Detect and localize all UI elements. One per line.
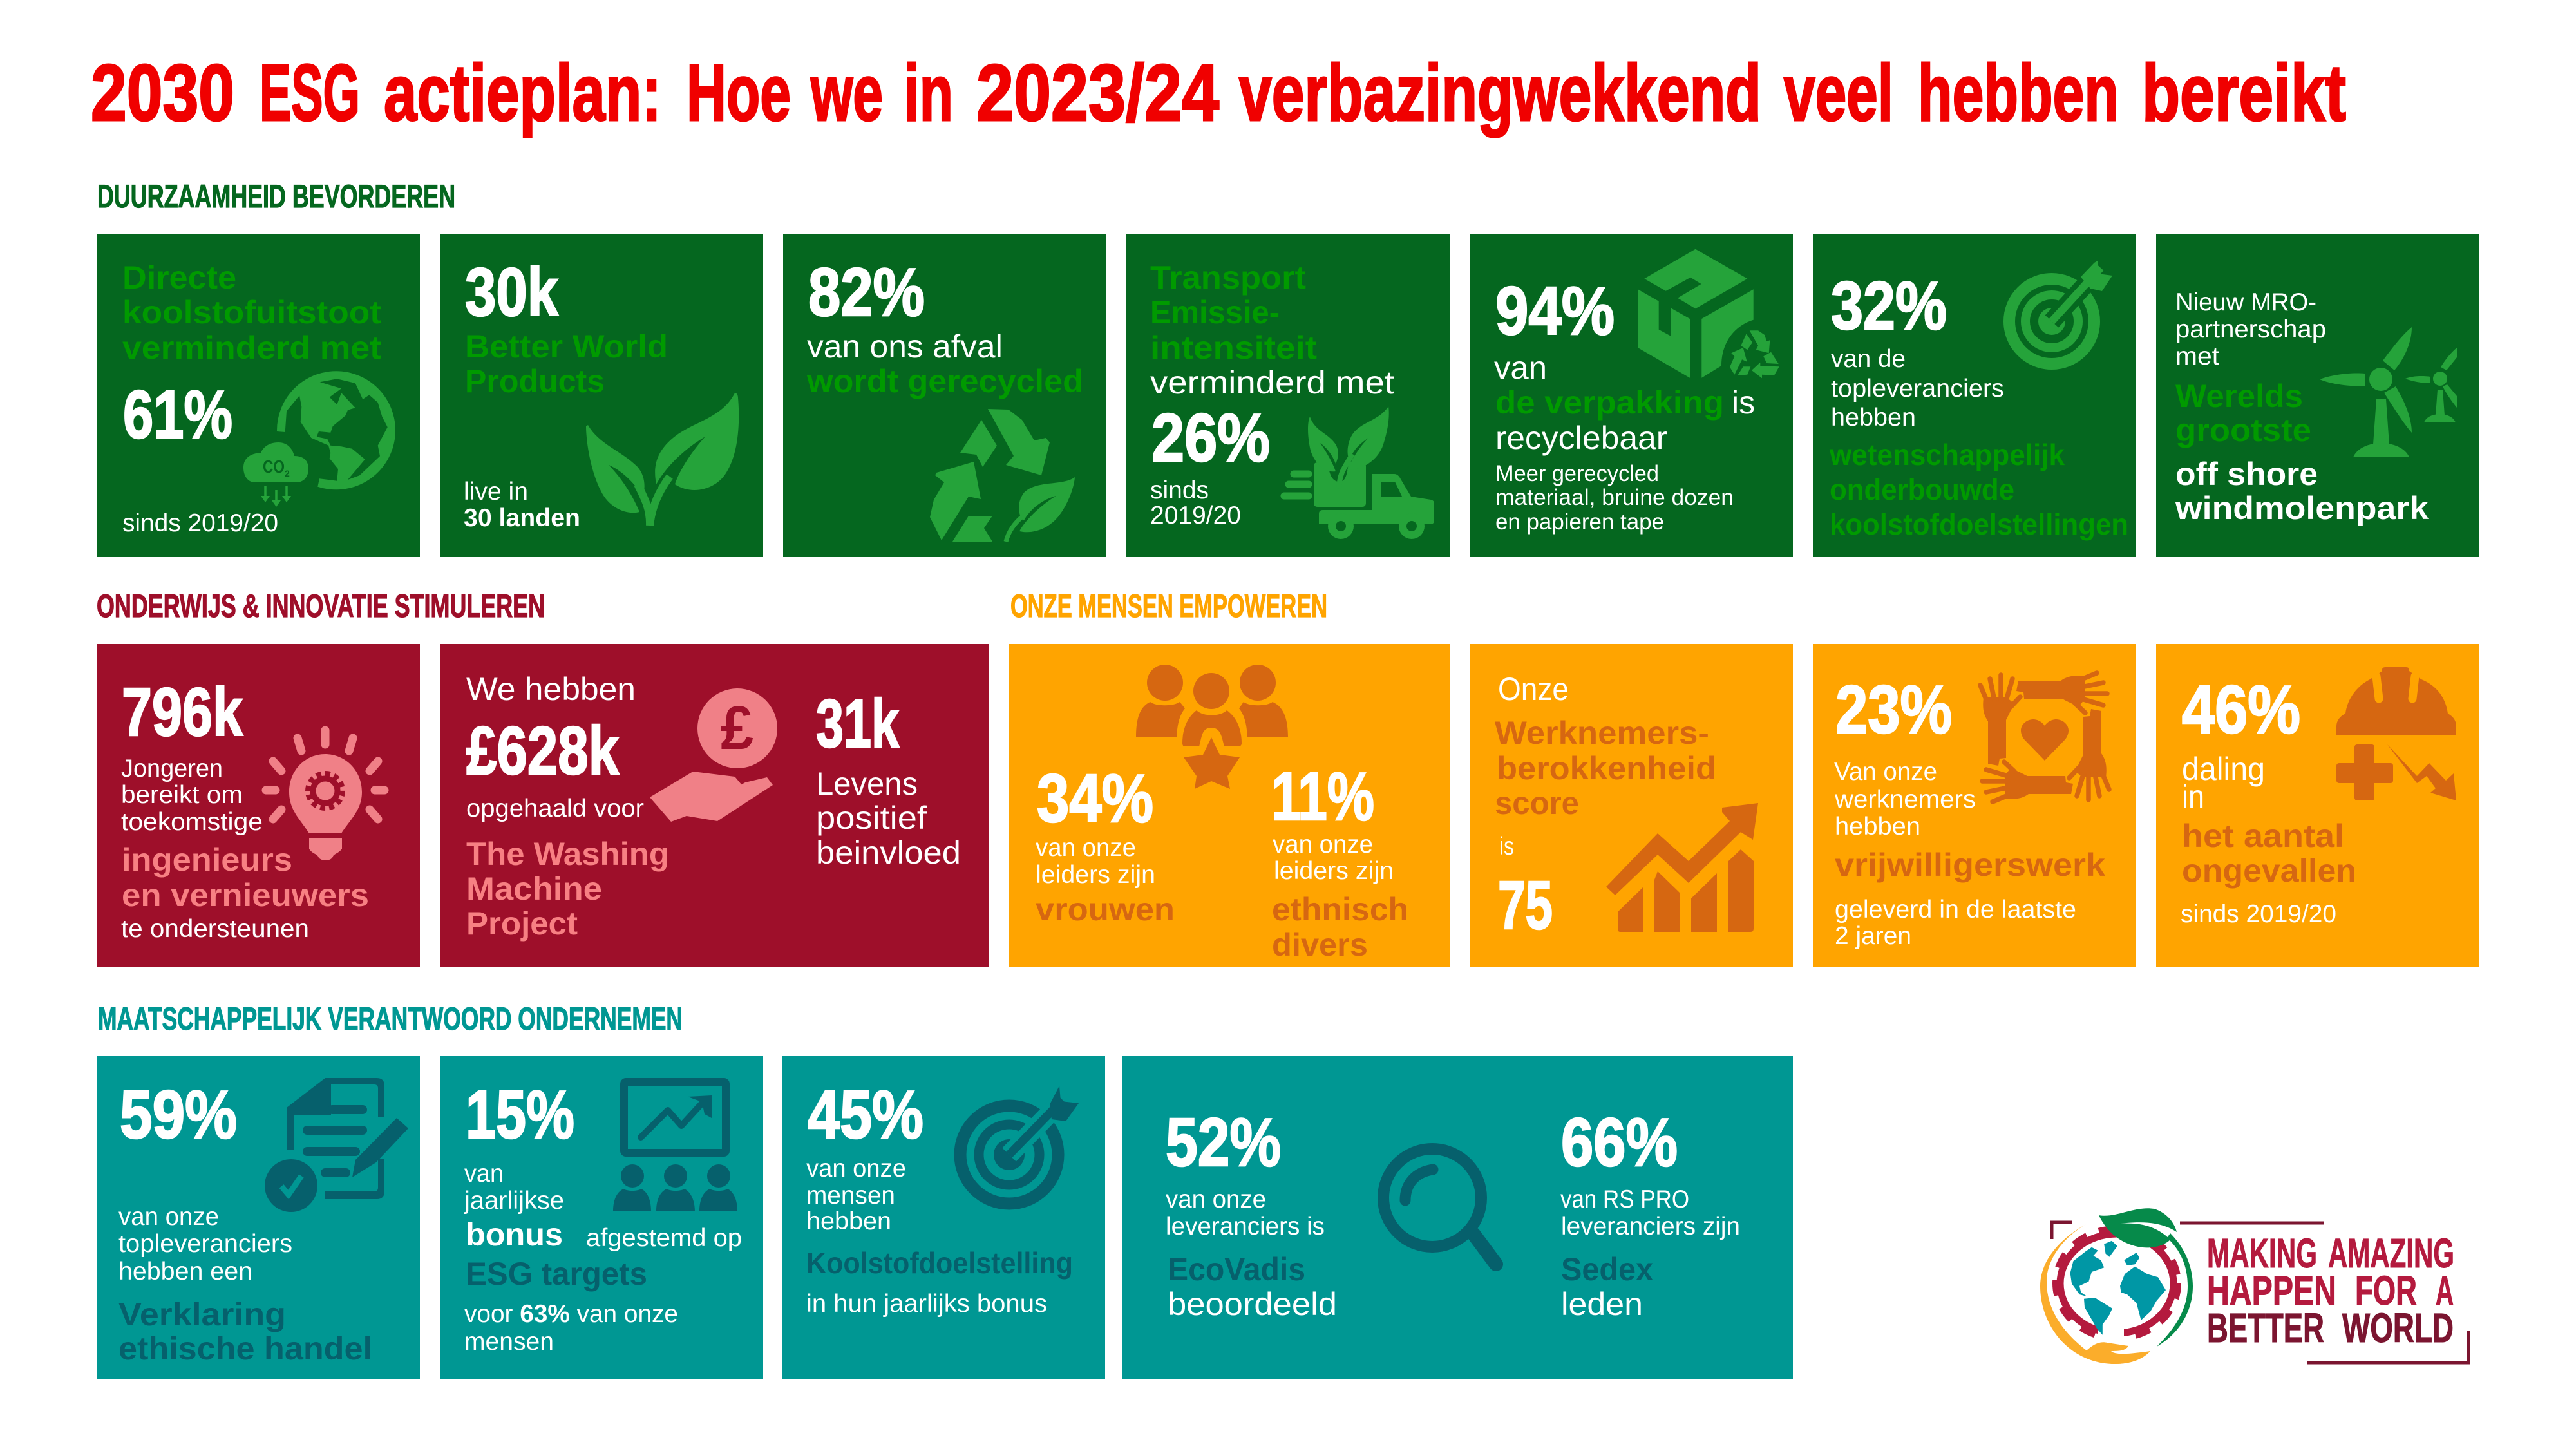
text: van onze werknemers hebben: hebben: [1835, 813, 1920, 840]
text: meer gerecycled materiaal: [1495, 461, 1734, 535]
text: van de verpakking is recyclebaar: [1494, 350, 1755, 456]
text: van onze mensen hebben: hebben: [806, 1208, 891, 1235]
text: van de topleveranciers hebben: van de: [1831, 345, 1906, 373]
text: van onze leiders zijn vrouwen: [1036, 834, 1175, 927]
title: [91, 49, 2346, 138]
text: van ons afval wordt gerecycled: wordt gerecycled: [806, 363, 1083, 399]
text: transport emissie-intensiteit: Transport: [1150, 260, 1306, 296]
text: opgehaald voor: opgehaald voor: [466, 795, 644, 822]
panel: 796k jongeren: [97, 644, 420, 967]
text: sinds 2019/20: [1150, 477, 1241, 529]
text: van onze werknemers hebben: [1834, 758, 1976, 840]
text: sinds 2019/20: sinds: [1150, 477, 1209, 504]
text: wetenschappelijk onderbouwde koolstofdoelstellingen: koolstofdoelstellingen: [1830, 507, 2128, 541]
title: ESG: [260, 49, 360, 138]
icon: wind turbines: [2320, 327, 2457, 457]
text: sinds 2019/20: sinds 2019/20: [122, 509, 278, 537]
text: better world products: [465, 328, 668, 399]
text: transport emissie-intensiteit: intensiteit: [1150, 330, 1317, 366]
text: van onze topleveranciers hebben een: [118, 1203, 292, 1285]
icon: coin in hand: [650, 688, 777, 822]
text: is: is: [1499, 833, 1514, 860]
text: ESG targets: ESG targets: [466, 1256, 647, 1292]
text: off shore windmolenpark: off shore: [2175, 456, 2318, 492]
panel: directe koolstofuitstoot: [97, 234, 420, 557]
text: van onze leiders zijn ethnisch divers: [1272, 831, 1408, 963]
text: van onze mensen hebben: van onze: [806, 1155, 906, 1182]
text: nieuw MRO-partnerschap met: Nieuw MRO-: [2175, 289, 2316, 316]
panel: ecovadis en sedex: [1122, 1056, 1793, 1379]
logo text: A: [2436, 1267, 2454, 1314]
text: jongeren bereikt om toekomstige: toekomstige: [121, 808, 263, 836]
text: sinds 2019/20: 2019/20: [1150, 502, 1241, 529]
title: veel: [1784, 49, 1893, 138]
panel: vrijwilligerswerk: [1813, 644, 2136, 967]
text: directe koolstofuitstoot verminderd met: Directe: [122, 260, 236, 296]
icon: rising chart: [1606, 803, 1758, 932]
logo text: HAPPEN: [2207, 1267, 2336, 1314]
text: off shore windmolenpark: [2175, 456, 2429, 526]
text: werelds grootste: Werelds: [2175, 378, 2303, 414]
text: van jaarlijkse bonus afgestemd op: afgestemd op: [586, 1224, 742, 1252]
text: meer gerecycled materiaal: en papieren tape: [1495, 509, 1664, 535]
text: van de verpakking is recyclebaar: is: [1732, 384, 1755, 421]
text: sedex leden: Sedex: [1561, 1251, 1653, 1287]
heading: maatschappelijk verantwoord ondernemen: MAATSCHAPPELIJK VERANTWOORD ONDERNEMEN: [98, 1001, 683, 1037]
heading: onderwijs en innovatie: ONDERWIJS & INNOVATIE STIMULEREN: [97, 588, 545, 624]
text: ecovadis beoordeeld: beoordeeld: [1168, 1286, 1337, 1322]
title: Hoe: [687, 49, 791, 138]
panel: daling ongevallen: [2156, 644, 2479, 967]
title: we: [810, 49, 883, 138]
text: sedex leden: leden: [1561, 1286, 1643, 1322]
icon: light bulb with gear: [266, 730, 384, 860]
text: van ons afval wordt gerecycled: [806, 328, 1083, 399]
panel: MRO-partnerschap: [2156, 234, 2479, 557]
text: werknemers-berokkenheid score: [1495, 715, 1716, 821]
text: ecovadis beoordeeld: [1168, 1251, 1337, 1322]
text: van jaarlijkse bonus afgestemd op: jaarlijkse: [464, 1187, 564, 1215]
text: levens positief beinvloed: [816, 766, 961, 871]
text: van onze leiders zijn ethnisch divers: leiders zijn: [1274, 857, 1394, 885]
text: ingenieurs en vernieuwers: en vernieuwers: [122, 877, 369, 913]
text: geleverd in de laatste 2 jaren: [1835, 896, 2076, 950]
text: van onze werknemers hebben: werknemers: [1834, 786, 1976, 813]
text: levens positief beinvloed: positief: [816, 800, 927, 836]
text: van onze leiders zijn ethnisch divers: ethnisch: [1272, 891, 1408, 927]
stat: 66%: 66%: [1561, 1104, 1678, 1180]
text: van onze topleveranciers hebben een: van onze: [118, 1203, 219, 1231]
panel: leiders vrouwen en ethnisch divers: [1009, 644, 1450, 967]
text: transport emissie-intensiteit: Emissie-: [1150, 294, 1280, 330]
logo text: FOR: [2355, 1267, 2417, 1314]
logo: making amazing happen for a better world: [2040, 1208, 2468, 1364]
stat: 796k: 796k: [122, 674, 243, 750]
stat: 52%: 52%: [1166, 1104, 1281, 1180]
logo brackets: [2052, 1222, 2468, 1363]
logo text: [2207, 1230, 2454, 1351]
text: geleverd in de laatste 2 jaren: 2 jaren: [1835, 922, 1911, 950]
icon: document with pen and check: [265, 1078, 408, 1212]
text: van de topleveranciers hebben: [1831, 345, 2004, 431]
icon: leaves: [586, 393, 739, 526]
text: werelds grootste: [2175, 378, 2311, 448]
stat: 59%: 59%: [120, 1077, 237, 1153]
text: jongeren bereikt om toekomstige: [121, 755, 263, 836]
icon: people with star: [1136, 665, 1288, 789]
logo text: MAKING: [2207, 1230, 2317, 1276]
text: van onze mensen hebben: mensen: [806, 1182, 895, 1209]
icon: target with arrow: [960, 1086, 1079, 1204]
stat: 30k: 30k: [465, 254, 559, 330]
text: verklaring ethische handel: [118, 1296, 372, 1367]
panel: £628k the washing machine project: [440, 644, 989, 967]
text: onze: Onze: [1498, 671, 1569, 707]
stat: 94%: 94%: [1495, 273, 1615, 349]
text: verklaring ethische handel: Verklaring: [118, 1296, 286, 1332]
stat: 75: 75: [1498, 867, 1553, 943]
text: ingenieurs en vernieuwers: ingenieurs: [122, 842, 292, 878]
text: directe koolstofuitstoot verminderd met: [122, 260, 381, 366]
icon: recycling arrows with leaf: [930, 409, 1075, 542]
text: van de verpakking is recyclebaar: de verpakking: [1495, 384, 1724, 421]
panel: werknemersbetrokkenheid score: [1470, 644, 1793, 967]
stat: 23%: 23%: [1835, 672, 1952, 748]
text: van onze topleveranciers hebben een: hebben een: [118, 1258, 252, 1285]
stat: 26%: 26%: [1151, 400, 1270, 476]
panel: topleveranciers koolstofdoelstellingen: [1813, 234, 2136, 557]
text: daling in: daling: [2182, 751, 2265, 787]
panel: verklaring ethische handel: [97, 1056, 420, 1379]
stat: £628k: £628k: [466, 713, 620, 789]
stat: 34%: 34%: [1037, 761, 1153, 837]
text: van onze leiders zijn vrouwen: van onze: [1036, 834, 1136, 862]
text: voor 63% van onze mensen: voor 63% van onze: [464, 1300, 678, 1328]
text: off shore windmolenpark: windmolenpark: [2175, 490, 2429, 526]
title: actieplan:: [384, 49, 661, 138]
text: meer gerecycled materiaal: Meer gerecycled: [1495, 461, 1659, 486]
text: better world products: Products: [465, 363, 605, 399]
text: transport emissie-intensiteit: [1150, 260, 1317, 366]
icon: globe with CO2 cloud: CO: [263, 457, 285, 477]
text: van onze topleveranciers hebben een: topleveranciers: [118, 1230, 292, 1258]
text: voor 63% van onze mensen: mensen: [464, 1328, 554, 1356]
icon: four hands around a heart: [1980, 673, 2109, 802]
text: geleverd in de laatste 2 jaren: geleverd in de laatste: [1835, 896, 2076, 923]
logo emblem: gear, globe, leaf and hand: [2040, 1208, 2193, 1364]
text: werknemers-berokkenheid score: Werknemers-: [1495, 715, 1709, 751]
text: van jaarlijkse bonus afgestemd op: bonus: [466, 1217, 563, 1253]
text: jongeren bereikt om toekomstige: Jongeren: [121, 755, 223, 782]
text: van RS PRO leveranciers zijn: van RS PRO: [1560, 1186, 1689, 1213]
text: nieuw MRO-partnerschap met: met: [2175, 343, 2219, 370]
stat: 45%: 45%: [808, 1077, 923, 1153]
text: van jaarlijkse bonus afgestemd op: [464, 1160, 742, 1253]
text: live in 30 landen: 30 landen: [464, 504, 580, 532]
text: van onze leveranciers is: [1166, 1186, 1325, 1240]
icon: globe with CO2 cloud: 2: [285, 468, 290, 478]
text: het aantal ongevallen: ongevallen: [2182, 853, 2356, 889]
icon: recyclable box: [1638, 249, 1779, 378]
text: ingenieurs en vernieuwers: [122, 842, 369, 913]
text: verminderd met: verminderd met: [1150, 365, 1394, 401]
text: van onze leveranciers is: van onze: [1166, 1186, 1266, 1213]
icon: globe with CO2 cloud: [243, 371, 395, 507]
text: directe koolstofuitstoot verminderd met: koolstofuitstoot: [122, 294, 381, 330]
text: the washing machine project: Project: [466, 905, 578, 942]
stat: 82%: 82%: [808, 254, 925, 330]
text: the washing machine project: The Washing: [466, 836, 669, 872]
text: het aantal ongevallen: het aantal: [2182, 818, 2344, 854]
stat: 15%: 15%: [466, 1077, 574, 1153]
text: koolstofdoelstelling: Koolstofdoelstelling: [806, 1246, 1073, 1280]
icon: presentation board and audience: [613, 1082, 737, 1211]
text: the washing machine project: [466, 836, 669, 942]
text: van de verpakking is recyclebaar: recyclebaar: [1495, 420, 1667, 456]
panel: transport emissie-intensiteit: [1126, 234, 1450, 557]
text: levens positief beinvloed: Levens: [816, 766, 918, 802]
title: bereikt: [2142, 49, 2346, 138]
text: sinds 2019/20: sinds 2019/20: [2181, 900, 2336, 928]
logo text: WORLD: [2342, 1305, 2454, 1351]
heading: onze mensen empoweren: ONZE MENSEN EMPOWEREN: [1010, 588, 1327, 624]
text: van onze leiders zijn ethnisch divers: van onze: [1273, 831, 1373, 858]
text: vrijwilligerswerk: vrijwilligerswerk: [1835, 847, 2105, 883]
icon: magnifying glass: [1383, 1149, 1496, 1264]
logo text: AMAZING: [2328, 1230, 2454, 1276]
icon: target with arrow: [2009, 261, 2112, 364]
text: van onze leveranciers is: leveranciers is: [1166, 1213, 1325, 1240]
text: in hun jaarlijks bonus: in hun jaarlijks bonus: [806, 1290, 1047, 1318]
icon: coin in hand: £: [721, 694, 753, 762]
heading: duurzaamheid bevorderen: DUURZAAMHEID BEVORDEREN: [97, 178, 455, 214]
text: ecovadis beoordeeld: EcoVadis: [1168, 1251, 1305, 1287]
text: wetenschappelijk onderbouwde koolstofdoelstellingen: onderbouwde: [1830, 473, 2014, 506]
text: better world products: Better World: [465, 328, 668, 365]
text: meer gerecycled materiaal: materiaal, bruine dozen: [1495, 485, 1734, 510]
title: 2023/24: [976, 49, 1219, 138]
text: van onze leiders zijn ethnisch divers: divers: [1272, 927, 1368, 963]
text: van jaarlijkse bonus afgestemd op: van: [464, 1160, 504, 1188]
text: van onze leiders zijn vrouwen: leiders zijn: [1036, 861, 1155, 889]
text: van onze werknemers hebben: Van onze: [1834, 758, 1937, 786]
panel: better world products: [440, 234, 763, 557]
icon: truck with plant: [1284, 406, 1434, 539]
text: voor 63% van onze mensen: [464, 1300, 678, 1356]
text: nieuw MRO-partnerschap met: [2175, 289, 2326, 370]
text: we hebben: We hebben: [466, 671, 636, 707]
text: wetenschappelijk onderbouwde koolstofdoelstellingen: [1829, 438, 2128, 541]
text: sedex leden: [1561, 1251, 1653, 1322]
text: van onze mensen hebben: [806, 1155, 906, 1235]
stat: 61%: 61%: [123, 377, 232, 453]
text: van de topleveranciers hebben: topleveranciers: [1831, 375, 2004, 402]
text: van onze leiders zijn vrouwen: vrouwen: [1036, 891, 1175, 927]
stat: 46%: 46%: [2182, 672, 2300, 748]
text: directe koolstofuitstoot verminderd met: verminderd met: [122, 330, 381, 366]
text: van ons afval wordt gerecycled: van ons afval: [807, 328, 1003, 365]
panel: koolstofdoelstelling bonus: [782, 1056, 1105, 1379]
text: werelds grootste: grootste: [2175, 412, 2311, 448]
title: hebben: [1918, 49, 2119, 138]
title: 2030: [91, 49, 234, 138]
text: het aantal ongevallen: [2182, 818, 2356, 889]
title: verbazingwekkend: [1239, 49, 1761, 138]
text: verklaring ethische handel: ethische handel: [118, 1331, 372, 1367]
text: live in 30 landen: [464, 478, 580, 532]
text: van de verpakking is recyclebaar: van: [1494, 350, 1547, 386]
text: the washing machine project: Machine: [466, 871, 602, 907]
panel: bonus ESG targets: [440, 1056, 763, 1379]
stat: 11%: 11%: [1271, 759, 1374, 835]
text: daling in: [2182, 751, 2265, 815]
title: in: [904, 49, 953, 138]
text: van RS PRO leveranciers zijn: leveranciers zijn: [1561, 1213, 1740, 1240]
text: levens positief beinvloed: beinvloed: [816, 835, 961, 871]
text: nieuw MRO-partnerschap met: partnerschap: [2175, 316, 2326, 343]
text: daling in: in: [2182, 779, 2204, 815]
logo text: BETTER: [2207, 1305, 2324, 1351]
stat: 31k: 31k: [816, 686, 900, 762]
text: van de topleveranciers hebben: hebben: [1831, 404, 1916, 431]
stat: 32%: 32%: [1831, 268, 1947, 344]
panel: verpakking recyclebaar: [1470, 234, 1793, 557]
text: wetenschappelijk onderbouwde koolstofdoelstellingen: wetenschappelijk: [1829, 438, 2065, 471]
text: te ondersteunen: te ondersteunen: [121, 915, 309, 943]
panel: afval gerecycled: [783, 234, 1106, 557]
text: jongeren bereikt om toekomstige: bereikt om: [121, 781, 243, 809]
text: werknemers-berokkenheid score: berokkenheid: [1497, 750, 1716, 786]
icon: helmet, cross and falling arrow: [2336, 667, 2456, 800]
text: live in 30 landen: live in: [464, 478, 528, 506]
text: werknemers-berokkenheid score: score: [1495, 785, 1579, 821]
text: van RS PRO leveranciers zijn: [1560, 1186, 1740, 1240]
